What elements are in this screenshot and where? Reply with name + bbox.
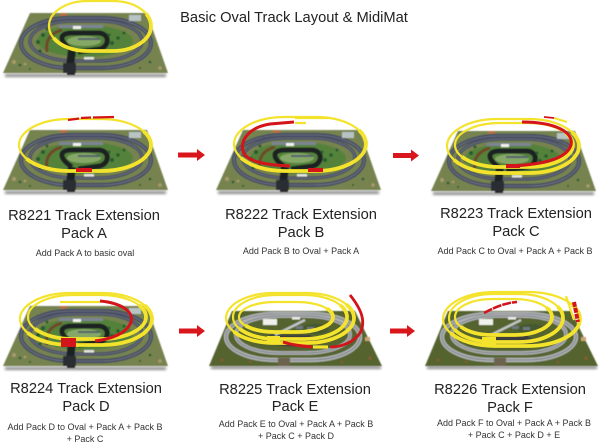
panel: pack F — [425, 292, 598, 440]
heading: R8223: Pack C — [492, 224, 540, 240]
yellow ovals — [20, 293, 152, 345]
description: pack B: Add Pack B to Oval + Pack A — [243, 246, 359, 256]
heading: R8222: R8222 Track Extension — [225, 207, 377, 223]
yellow ovals — [226, 293, 354, 347]
yellow oval track overlay — [49, 1, 151, 51]
heading: R8225: Pack E — [272, 399, 318, 415]
heading: R8223 — [440, 206, 592, 240]
heading: R8225: R8225 Track Extension — [219, 382, 371, 398]
heading: R8226: R8226 Track Extension — [434, 382, 586, 398]
arrow: E to F — [390, 325, 415, 337]
panel: pack E — [209, 293, 382, 441]
panel: pack D — [3, 293, 168, 443]
heading: R8221: Pack A — [61, 226, 107, 242]
description: pack E: + Pack C + Pack D — [258, 431, 335, 441]
heading: R8224: Pack D — [62, 399, 110, 415]
red pack A pieces — [68, 117, 114, 170]
title: Basic Oval Track Layout & MidiMat — [180, 10, 408, 26]
description: pack A: Add Pack A to basic oval — [36, 248, 134, 258]
panel: pack B — [216, 117, 381, 256]
description: pack E: Add Pack E to Oval + Pack A + Pack B — [219, 419, 373, 429]
board: pack F — [425, 311, 598, 369]
heading: R8221: R8221 Track Extension — [8, 208, 160, 224]
heading: R8222: Pack B — [278, 225, 324, 241]
red pack B pieces — [242, 122, 323, 170]
arrow: A to B — [178, 149, 205, 161]
description: pack C: Add Pack C to Oval + Pack A + Pack B — [437, 246, 593, 256]
yellow ovals — [447, 118, 579, 173]
panel: pack A — [3, 117, 168, 258]
board: pack C — [431, 131, 596, 195]
description: pack F: Add Pack F to Oval + Pack A + Pack B — [437, 418, 591, 428]
panel: pack C — [431, 117, 596, 256]
heading: R8226: Pack F — [487, 400, 533, 416]
heading: R8224 — [10, 381, 162, 415]
red pack F pieces — [484, 302, 578, 322]
heading: R8225 — [219, 382, 371, 415]
red pack D pieces — [61, 301, 131, 347]
description: pack F — [437, 418, 591, 440]
board: basic oval track and MidiMat — [3, 13, 168, 77]
yellow ovals — [443, 292, 580, 346]
panel: basic oval layout — [3, 1, 168, 77]
heading: R8221 — [8, 208, 160, 242]
arrow: B to C — [393, 150, 419, 162]
arrow: D to E — [179, 325, 205, 337]
description: pack D — [7, 422, 163, 443]
heading: R8226 — [434, 382, 586, 416]
heading: R8223: R8223 Track Extension — [440, 206, 592, 222]
board: pack B — [216, 130, 381, 194]
description: pack D: Add Pack D to Oval + Pack A + Pack B — [7, 422, 163, 432]
description: pack E — [219, 419, 373, 441]
board: pack E — [209, 311, 382, 369]
board: pack A — [3, 130, 168, 194]
board: pack D — [3, 306, 168, 370]
description: pack F: + Pack C + Pack D + E — [468, 430, 560, 440]
yellow oval — [19, 119, 151, 171]
heading: R8224: R8224 Track Extension — [10, 381, 162, 397]
heading: R8222 — [225, 207, 377, 241]
red pack E pieces — [283, 295, 363, 347]
red pack C pieces — [506, 117, 571, 166]
yellow oval — [234, 117, 366, 171]
